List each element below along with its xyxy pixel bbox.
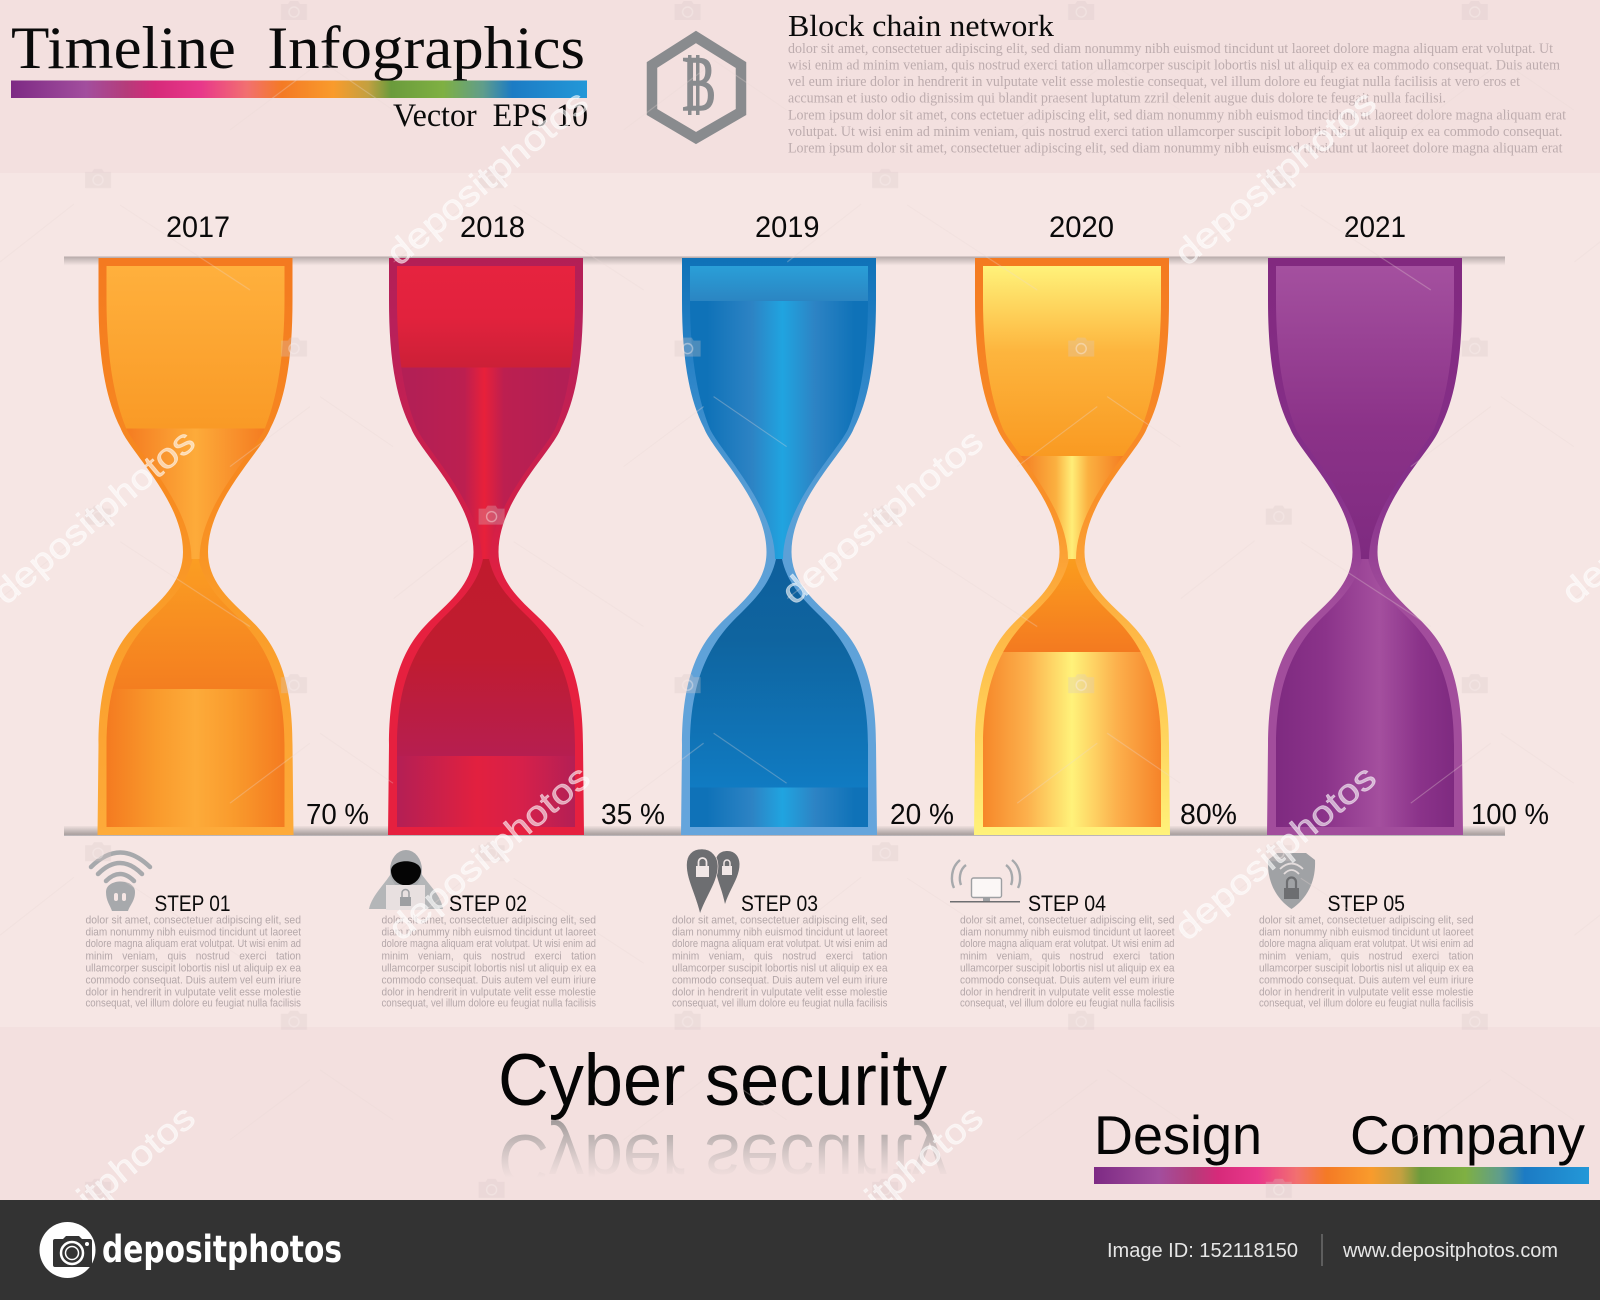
top rail xyxy=(64,256,1505,266)
step 04 description: commodo consequat. Duis autem vel eum iriure xyxy=(960,974,1174,986)
step 01 description: ullamcorper suscipit lobortis nisl ut aliquip ex ea xyxy=(86,962,301,974)
icon: hooded hacker xyxy=(369,850,443,910)
step 03 description: diam nonummy nibh euismod tincidunt ut laoreet xyxy=(672,926,888,938)
step 01 description: minim veniam, quis nostrud exerci tation xyxy=(86,950,301,962)
rainbow bar under title xyxy=(11,80,587,98)
step 02 description: diam nonummy nibh euismod tincidunt ut laoreet xyxy=(382,926,596,938)
step 03 xyxy=(672,849,888,1010)
depositphotos watermarks: depositphotos xyxy=(774,422,991,612)
year labels xyxy=(166,211,1406,244)
step 05 description: minim veniam, quis nostrud exerci tation xyxy=(1259,950,1474,962)
subtitle: Vector EPS 10 xyxy=(393,98,588,134)
step 04 label: STEP 04 xyxy=(1028,891,1106,916)
step 01 description: dolor sit amet, consectetuer adipiscing elit, sed xyxy=(86,914,301,926)
step 04 xyxy=(950,860,1175,1010)
depositphotos watermarks: depositphotos xyxy=(774,1098,991,1288)
step 03 description: minim veniam, quis nostrud exerci tation xyxy=(672,950,888,962)
step 04 description: dolore magna aliquam erat volutpat. Ut wisi enim ad xyxy=(960,938,1174,950)
icon: wifi skull xyxy=(91,852,150,911)
percentage labels: 20 % xyxy=(890,799,954,831)
step 04 description: consequat, vel illum dolore eu feugiat nulla facilisis xyxy=(960,998,1175,1010)
depositphotos watermarks: depositphotos xyxy=(379,83,596,273)
hourglass 2018 red xyxy=(388,258,584,835)
percentage labels: 80% xyxy=(1180,799,1237,831)
block chain paragraph: wisi enim ad minim veniam, quis nostrud exerci tation ullamcorper suscipit lobortis nisl ut aliquip ex ea commodo consequat. Duis autem xyxy=(788,58,1561,74)
step 04 description: minim veniam, quis nostrud exerci tation xyxy=(960,950,1174,962)
header text: block chain network xyxy=(788,8,1566,157)
step 01 description: consequat, vel illum dolore eu feugiat nulla facilisis xyxy=(86,998,302,1010)
step 02 description: dolor sit amet, consectetuer adipiscing elit, sed xyxy=(382,914,596,926)
heading: cyber security: Cyber security xyxy=(498,1040,947,1121)
icon: depositphotos camera logo xyxy=(40,1222,96,1278)
step 04 description: dolor sit amet, consectetuer adipiscing elit, sed xyxy=(960,914,1174,926)
icon: lock map pins xyxy=(686,849,740,914)
step 05 description xyxy=(1259,914,1474,1010)
percentage labels: 100 % xyxy=(1471,799,1549,831)
percentage labels: 70 % xyxy=(306,799,369,831)
depositphotos watermarks: depositphotos xyxy=(381,758,598,948)
rainbow bar xyxy=(1094,1167,1589,1184)
heading reflection: Cyber security xyxy=(498,1119,947,1200)
step 02 description: dolor in hendrerit in vulputate velit esse molestie xyxy=(382,986,596,998)
company: Company xyxy=(1350,1104,1585,1166)
block chain paragraph: volutpat. Ut wisi enim ad minim veniam, quis nostrud exerci tation ullamcorper suscipit lobortis nisl ut aliquip ex ea commodo consequat. xyxy=(788,124,1562,140)
footer band xyxy=(0,1200,1600,1300)
block chain paragraph: accumsan et iusto odio dignissim qui blandit praesent luptatum zzril delenit augue duis dolore te feugait nulla facilisi. xyxy=(788,91,1446,107)
step 01 label: STEP 01 xyxy=(154,891,230,916)
step 03 description: ullamcorper suscipit lobortis nisl ut aliquip ex ea xyxy=(672,962,888,974)
step 01 description xyxy=(86,914,302,1010)
year labels: 2020 xyxy=(1049,211,1114,244)
title: Timeline Infographics xyxy=(11,15,585,81)
hourglass 2017 orange xyxy=(98,258,294,835)
step 01 xyxy=(86,852,302,1010)
block chain heading: Block chain network xyxy=(788,8,1055,43)
depositphotos watermarks: depositphotos xyxy=(1167,758,1384,948)
step 05 xyxy=(1259,853,1474,1010)
step 02 label: STEP 02 xyxy=(449,891,527,916)
block chain paragraph: Lorem ipsum dolor sit amet, cons ectetuer adipiscing elit, sed diam nonummy nibh euismod tincidunt ut laoreet dolore magna aliquam erat xyxy=(788,107,1566,123)
design company label xyxy=(1094,1104,1589,1184)
icon: shield lock xyxy=(1268,853,1315,909)
step 02 description: ullamcorper suscipit lobortis nisl ut aliquip ex ea xyxy=(382,962,596,974)
block chain paragraph xyxy=(788,41,1566,157)
step 05 description: dolor sit amet, consectetuer adipiscing elit, sed xyxy=(1259,914,1474,926)
step 05 description: commodo consequat. Duis autem vel eum iriure xyxy=(1259,974,1474,986)
step 01 description: diam nonummy nibh euismod tincidunt ut laoreet xyxy=(86,926,301,938)
step 02 description: dolore magna aliquam erat volutpat. Ut wisi enim ad xyxy=(382,938,596,950)
step 05 description: diam nonummy nibh euismod tincidunt ut laoreet xyxy=(1259,926,1474,938)
step 01 description: dolor in hendrerit in vulputate velit esse molestie xyxy=(86,986,301,998)
footer divider xyxy=(1322,1234,1323,1266)
step 05 description: dolor in hendrerit in vulputate velit esse molestie xyxy=(1259,986,1474,998)
year labels: 2019 xyxy=(755,211,820,244)
block chain paragraph: vel eum iriure dolor in hendrerit in vulputate velit esse molestie consequat, vel illum dolore eu feugiat nulla facilisis at vero eros et xyxy=(788,74,1520,90)
step 05 description: ullamcorper suscipit lobortis nisl ut aliquip ex ea xyxy=(1259,962,1474,974)
step 04 description xyxy=(960,914,1175,1010)
step 05 label: STEP 05 xyxy=(1328,891,1405,916)
hourglass 2021 purple xyxy=(1267,258,1463,835)
image id: Image ID: 152118150 xyxy=(1107,1240,1298,1262)
step 04 description: dolor in hendrerit in vulputate velit esse molestie xyxy=(960,986,1174,998)
icon: hexagon baht coin: B xyxy=(682,40,716,127)
step 01 description: dolore magna aliquam erat volutpat. Ut wisi enim ad xyxy=(86,938,301,950)
step 02 description: consequat, vel illum dolore eu feugiat nulla facilisis xyxy=(382,998,597,1010)
step 03 description: dolore magna aliquam erat volutpat. Ut wisi enim ad xyxy=(672,938,888,950)
step 04 description: diam nonummy nibh euismod tincidunt ut laoreet xyxy=(960,926,1174,938)
percentage labels xyxy=(306,799,1549,831)
design: Design xyxy=(1094,1104,1262,1166)
icon: wireless monitor xyxy=(950,860,1020,902)
step 03 description: dolor in hendrerit in vulputate velit esse molestie xyxy=(672,986,888,998)
step 03 description: dolor sit amet, consectetuer adipiscing elit, sed xyxy=(672,914,888,926)
block chain paragraph: Lorem ipsum dolor sit amet, consectetuer adipiscing elit, sed diam nonummy nibh euismod tincidunt ut laoreet dolore magna aliquam erat xyxy=(788,141,1562,157)
depositphotos wordmark: depositphotos xyxy=(102,1228,342,1271)
step 05 description: consequat, vel illum dolore eu feugiat nulla facilisis xyxy=(1259,998,1474,1010)
year labels: 2021 xyxy=(1344,211,1406,244)
step 01 description: commodo consequat. Duis autem vel eum iriure xyxy=(86,974,301,986)
step 02 xyxy=(369,850,597,1010)
bottom rail xyxy=(64,826,1505,836)
step 02 description xyxy=(382,914,597,1010)
step 05 description: dolore magna aliquam erat volutpat. Ut wisi enim ad xyxy=(1259,938,1474,950)
step 04 description: ullamcorper suscipit lobortis nisl ut aliquip ex ea xyxy=(960,962,1174,974)
hourglass 2019 blue xyxy=(681,258,877,835)
block chain paragraph: dolor sit amet, consectetuer adipiscing elit, sed diam nonummy nibh euismod tincidunt ut laoreet dolore magna aliquam erat volutpat. Ut xyxy=(788,41,1553,57)
depositphotos watermarks: depositphotos xyxy=(1167,83,1384,273)
step 03 description: commodo consequat. Duis autem vel eum iriure xyxy=(672,974,888,986)
step 03 label: STEP 03 xyxy=(741,891,818,916)
step 02 description: commodo consequat. Duis autem vel eum iriure xyxy=(382,974,596,986)
header: title block xyxy=(11,15,588,134)
year labels: 2018 xyxy=(460,211,525,244)
icon: hexagon baht coin xyxy=(652,37,741,138)
year labels: 2017 xyxy=(166,211,230,244)
step 03 description: consequat, vel illum dolore eu feugiat nulla facilisis xyxy=(672,998,888,1010)
website: www.depositphotos.com xyxy=(1342,1240,1558,1262)
hourglass 2020 yellow xyxy=(974,258,1170,835)
step 02 description: minim veniam, quis nostrud exerci tation xyxy=(382,950,596,962)
step 03 description xyxy=(672,914,888,1010)
percentage labels: 35 % xyxy=(601,799,665,831)
